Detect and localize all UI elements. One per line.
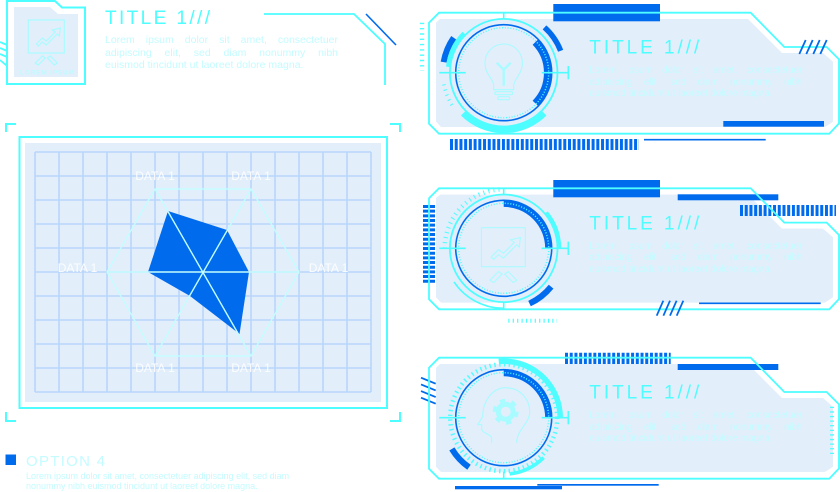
- top bar: [553, 180, 660, 197]
- bottom lines: [455, 486, 562, 489]
- card frame: [7, 1, 85, 84]
- radar labels: DATA 1: [231, 361, 271, 375]
- gauge: [418, 163, 589, 334]
- frame: [429, 358, 839, 479]
- top stripes: [565, 353, 671, 364]
- text block: panel 2 description: adipiscing elit, sed diam nonummy nibh: [589, 252, 802, 263]
- panel: radar chart: [6, 124, 400, 421]
- slashes: [799, 40, 827, 54]
- radar labels: DATA 1: [58, 261, 98, 275]
- text block: option 4 description: Lorem ipsum dolor sit amet, consectetuer adipiscing elit, sed diam: [26, 471, 289, 481]
- panel fill: [436, 19, 833, 127]
- panel: head and gear: [419, 333, 839, 492]
- icon: head with gear: [478, 388, 530, 443]
- left slashes: [421, 378, 436, 404]
- text block: panel 3 description: euismod tincidunt ut laoreet dolore magna.: [589, 433, 772, 444]
- legend: option 4: OPTION 4: [26, 453, 105, 470]
- radar labels: DATA 1: [135, 361, 175, 375]
- text block: panel 1 description: [589, 65, 802, 99]
- frame: [429, 13, 839, 134]
- card label: LOREM IPSUM: [20, 70, 74, 76]
- text block: panel 3 description: adipiscing elit, sed diam nonummy nibh: [589, 422, 802, 433]
- frame: [429, 188, 839, 309]
- gauge: [419, 333, 588, 492]
- panel fill: [436, 364, 833, 472]
- text block: panel 3 description: [589, 410, 802, 444]
- panel fill: [436, 195, 833, 303]
- second bar: [678, 364, 778, 370]
- radar labels: [58, 169, 349, 375]
- grid: [35, 152, 371, 392]
- text block: panel 1 description: adipiscing elit, sed diam nonummy nibh: [589, 77, 802, 88]
- chart background: [25, 143, 381, 402]
- panel title: TITLE 1///: [589, 38, 700, 59]
- heading: top-left title: TITLE 1///: [105, 8, 211, 29]
- text block: top-left description: Lorem ipsum dolor sit amet, consectetuer: [105, 34, 338, 46]
- top-right corner line: [264, 14, 396, 85]
- text block: top-left description: adipiscing elit, sed diam nonummy nibh: [105, 47, 338, 59]
- panel title: TITLE 1///: [589, 383, 700, 404]
- thin line below: [644, 139, 766, 141]
- corner brackets: [6, 124, 400, 421]
- text block: panel 2 description: [589, 240, 802, 275]
- text block: panel 2 description: euismod tincidunt ut laoreet dolore magna.: [589, 264, 772, 275]
- radar axes: [107, 189, 299, 356]
- icon: presentation board: [481, 228, 525, 283]
- panel: lightbulb: [418, 0, 839, 159]
- text block: panel 1 description: euismod tincidunt ut laoreet dolore magna.: [589, 88, 772, 99]
- icon: presentation board: [28, 20, 64, 65]
- stripes below: [450, 139, 639, 150]
- text block: panel 3 description: Lorem ipsum dolor sit amet, consectetuer: [589, 410, 802, 421]
- slashes: [657, 301, 683, 316]
- radar labels: DATA 1: [135, 169, 175, 183]
- panel title: TITLE 1///: [589, 213, 700, 234]
- card fill: [14, 7, 78, 77]
- panel: top-left icon card: [0, 1, 85, 84]
- radar labels: DATA 1: [309, 261, 349, 275]
- bottom ticks: [508, 319, 557, 323]
- left stripes: [423, 205, 435, 283]
- left ticks: [420, 23, 424, 71]
- gauge: [418, 0, 590, 159]
- card stripes: [0, 42, 7, 66]
- text block: panel 1 description: Lorem ipsum dolor sit amet, consectetuer: [589, 65, 802, 76]
- right ticks: [830, 407, 834, 456]
- radar hexagon: [107, 189, 299, 356]
- chart frame: [20, 137, 387, 408]
- icon: lightbulb: [485, 44, 522, 100]
- text block: panel 2 description: Lorem ipsum dolor sit amet, consectetuer: [589, 240, 802, 252]
- text block: top-left description: [105, 34, 338, 71]
- text block: top-left description: euismod tincidunt ut laoreet dolore magna.: [105, 59, 303, 71]
- thin line: [699, 302, 821, 304]
- right stripes: [740, 205, 836, 216]
- text block: option 4 description: [26, 471, 289, 491]
- bottom bar: [723, 121, 824, 127]
- panel: chart: [418, 163, 839, 334]
- top bar: [553, 4, 660, 21]
- radar labels: DATA 1: [231, 169, 271, 183]
- radar data polygon: [148, 211, 249, 334]
- second bar: [678, 194, 778, 200]
- text block: option 4 description: nonummy nibh euismod tincidunt ut laoreet dolore magna.: [26, 481, 258, 491]
